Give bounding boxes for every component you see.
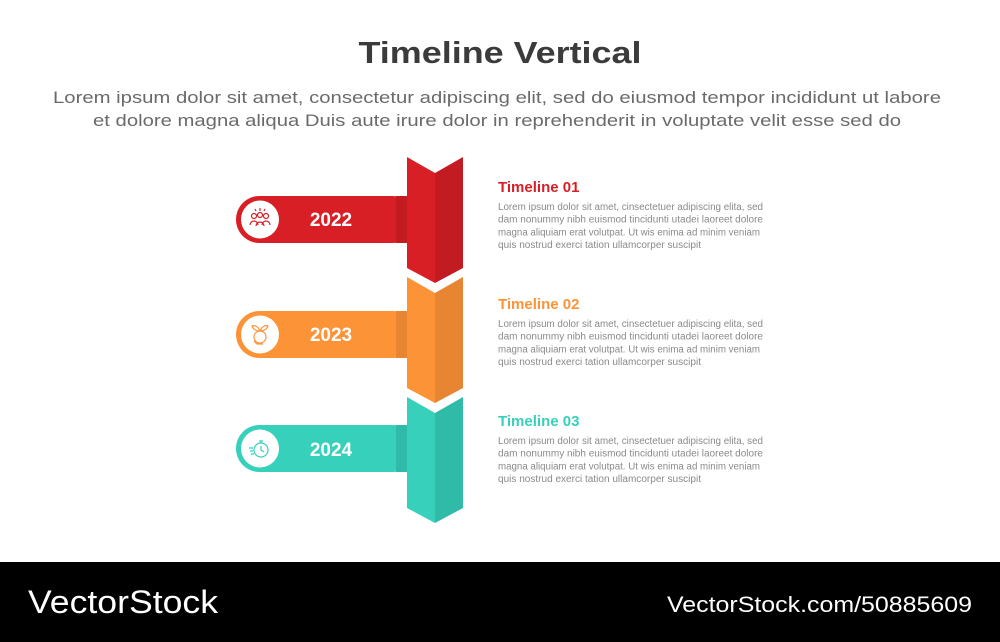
step 1: 2022 — [236, 157, 463, 283]
subtitle: et dolore magna aliqua Duis aute irure dolor in reprehenderit in voluptate velit esse sed do — [93, 111, 901, 130]
text block 2: quis nostrud exerci tation ullamcorper suscipit — [498, 357, 701, 368]
icon: plant globe — [252, 326, 268, 344]
text block 3: Timeline 03 — [498, 413, 579, 430]
text block 3: dam nonummy nibh euismod tincidunti utadei laoreet dolore — [498, 449, 763, 460]
bar 2022 — [236, 196, 416, 243]
text block 3: Lorem ipsum dolor sit amet, cinsectetuer adipiscing elita, sed — [498, 436, 763, 447]
text block 1 — [498, 179, 763, 251]
text block 2: Timeline 02 — [498, 296, 579, 313]
text block 3 — [498, 413, 763, 485]
subtitle — [53, 88, 941, 130]
step 3: 2024 — [236, 397, 463, 523]
text block 1: quis nostrud exerci tation ullamcorper suscipit — [498, 240, 701, 251]
footer bar: VectorStock.com/50885609 — [667, 592, 972, 617]
bar 2022: 2022 — [310, 210, 352, 231]
subtitle: Lorem ipsum dolor sit amet, consectetur adipiscing elit, sed do eiusmod tempor incididunt ut labore — [53, 88, 941, 107]
icon: stopwatch — [249, 441, 268, 457]
column segment 1 — [407, 157, 463, 283]
column segment 2 — [407, 277, 463, 403]
text block 2: dam nonummy nibh euismod tincidunti utadei laoreet dolore — [498, 332, 763, 343]
text block 2: magna aliquiam erat volutpat. Ut wis enima ad minim veniam — [498, 344, 760, 355]
footer bar: VectorStock — [28, 584, 219, 620]
bar 2024 — [236, 425, 416, 472]
text block 1: dam nonummy nibh euismod tincidunti utadei laoreet dolore — [498, 215, 763, 226]
title: Timeline Vertical — [358, 35, 642, 70]
footer bar — [0, 562, 1000, 642]
step 2: 2023 — [236, 277, 463, 403]
text block 3: quis nostrud exerci tation ullamcorper suscipit — [498, 474, 701, 485]
bar 2023: 2023 — [310, 325, 352, 346]
text block 2 — [498, 296, 763, 368]
column segment 3 — [407, 397, 463, 523]
bar 2023 — [236, 311, 416, 358]
bar 2024: 2024 — [310, 440, 353, 461]
text block 3: magna aliquiam erat volutpat. Ut wis enima ad minim veniam — [498, 461, 760, 472]
icon: people — [250, 208, 270, 226]
text block 2: Lorem ipsum dolor sit amet, cinsectetuer adipiscing elita, sed — [498, 319, 763, 330]
text block 1: magna aliquiam erat volutpat. Ut wis enima ad minim veniam — [498, 227, 760, 238]
text block 1: Lorem ipsum dolor sit amet, cinsectetuer adipiscing elita, sed — [498, 202, 763, 213]
text block 1: Timeline 01 — [498, 179, 579, 196]
